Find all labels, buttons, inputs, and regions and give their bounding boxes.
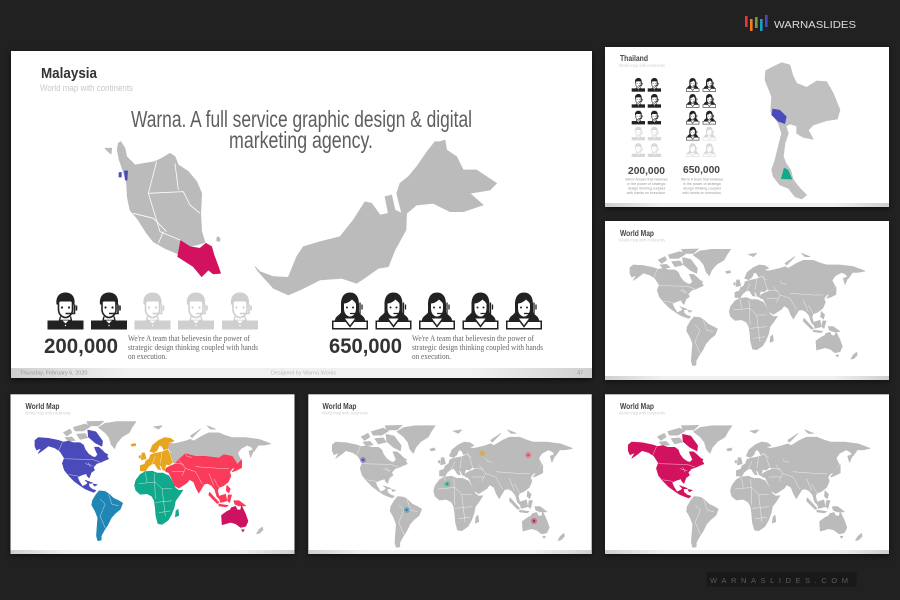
map: Penang highlight [119,171,128,181]
description: male agents: on execution. [128,352,167,361]
heading: Malaysia: Malaysia [41,65,98,82]
footer strip [605,550,889,554]
footer strip [10,550,294,554]
panel: world map with pins [308,394,592,556]
description: left: design thinking coupled [628,186,665,190]
panel: Thailand slide [605,47,889,209]
description: right [681,178,723,195]
description: male agents: strategic design thinking coupled with hands [128,343,258,352]
footer strip: 47 [577,370,583,376]
icons: male agents, 6 of 10 [632,78,661,157]
panel: Malaysia slide [11,51,592,380]
map: Thailand green region [781,168,792,179]
stat: 650,000: 650,000 [329,335,402,358]
heading: World Map [620,229,654,238]
description: female agents [412,334,543,361]
subtitle: World map with continents [619,410,666,416]
stat: 200,000: 200,000 [628,165,665,177]
subtitle: World map with continents [322,410,369,416]
footer strip [605,376,889,380]
headline [131,106,472,153]
footer strip [308,550,592,554]
subtitle: World map with continents [25,410,72,416]
description: right: We're A team that believes [681,178,723,182]
subtitle: World map with continents [40,83,133,93]
watermark: warnaslides.com: WARNASLIDES.COM [710,576,848,585]
world map [630,249,865,366]
logo: Warnaslides: WARNASLIDES [774,20,856,31]
description: left [625,178,668,195]
description: left: We're A team that believes [625,178,668,182]
watermark: warnaslides.com [707,572,857,587]
footer strip: Thursday, February 6, 2020 [20,370,87,376]
panel: world map continents colored [10,394,294,556]
map: Peninsular Malaysia [105,142,220,254]
icons: female agents, 5 of 5 [333,292,541,329]
world map [628,425,870,547]
description: male agents [128,334,258,361]
heading: World Map [322,402,357,411]
footer strip [605,203,889,207]
description: right: in the power of strategic [683,182,721,186]
description: female agents: We're A team that believesin the power of [412,334,534,343]
heading: World Map [26,402,60,411]
description: left: in the power of strategic [627,182,666,186]
map: Thailand [765,63,840,199]
logo: Warnaslides [745,15,856,31]
headline: Warna. A full service graphic design & digital [131,106,472,132]
world map [332,425,572,547]
description: left: with hands on execution. [627,191,666,195]
icons: male agents, 2 of 5 [48,292,258,330]
headline: marketing agency. [229,127,373,153]
description: female agents: on execution. [412,352,451,361]
description: right: with hands on execution. [682,191,722,195]
footer strip: Designed by Warna Works [271,370,336,376]
description: right: design thinking coupled [683,186,721,190]
subtitle: World map with continents [619,63,666,68]
world map [35,421,271,541]
heading: Thailand: Thailand [620,54,648,63]
description: male agents: We're A team that believesin the power of [128,334,250,343]
map: East Malaysia [255,140,497,295]
icons: female agents, 7 of 10 [686,78,716,157]
map: Johor highlight [178,241,221,277]
panel: world map grey slide [605,221,889,382]
subtitle: World map with continents [619,238,666,242]
panel: world map North America highlighted [605,394,889,556]
map: Thailand blue region [771,109,787,124]
footer strip [11,368,592,378]
heading: World Map [620,402,654,411]
stat: 650,000: 650,000 [683,164,720,176]
stat: 200,000: 200,000 [44,335,118,358]
description: female agents: strategic design thinking coupled with hands [412,343,543,352]
map pins [360,450,537,524]
